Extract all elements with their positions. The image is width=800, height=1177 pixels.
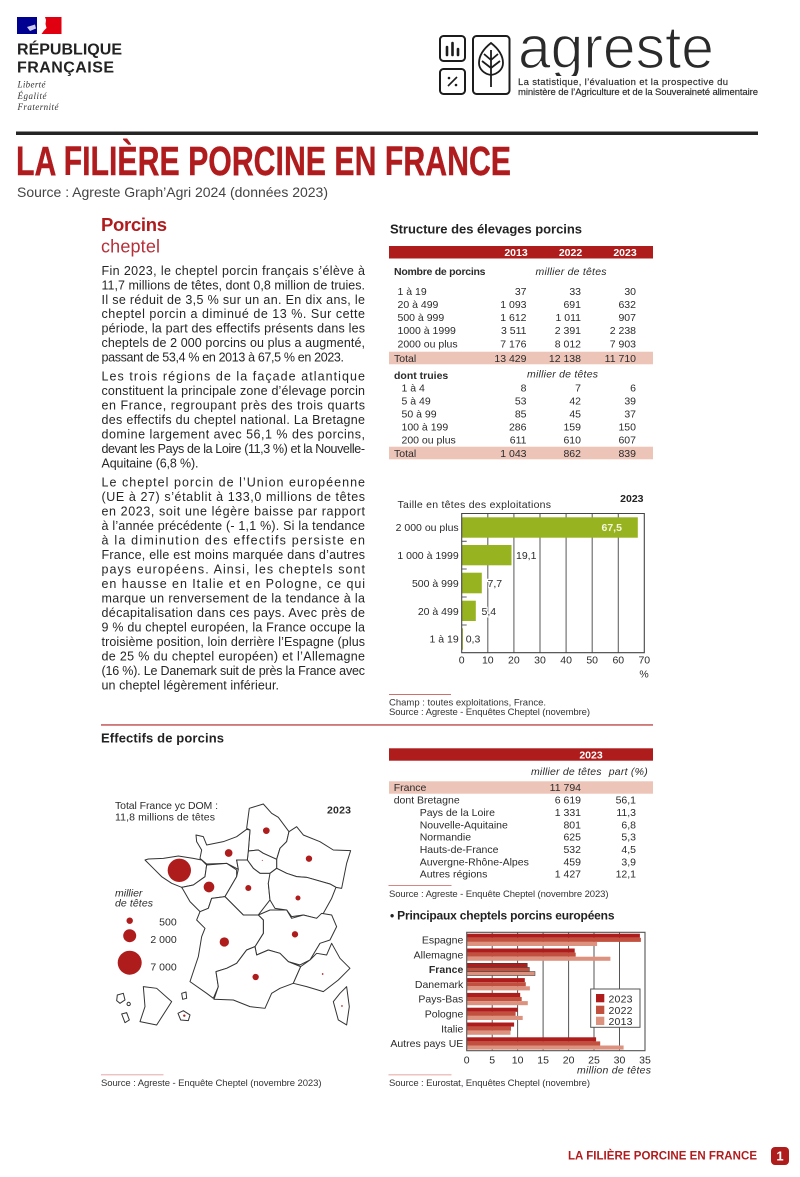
table: effectifs régionaux [389, 748, 653, 881]
heading: Effectifs de porcins: Effectifs de porcins [101, 730, 224, 746]
subheading: cheptel: cheptel [101, 236, 160, 256]
chart: taille en têtes des exploitations: 1 à 19 [429, 634, 459, 646]
table: effectifs régionaux: Auvergne-Rhône-Alpes [420, 856, 529, 868]
text block: paragraph 3: de 25 % du cheptel européen) et l’Allemagne [102, 650, 365, 664]
heading: Principaux cheptels porcins européens: • Principaux cheptels porcins européens [390, 908, 615, 922]
table: structure des élevages: 13 429 [494, 353, 527, 365]
table: effectifs régionaux: 459 [563, 856, 581, 868]
heading: Structure des élevages porcins: Structure des élevages porcins [390, 222, 582, 236]
map title: 2023 [327, 804, 351, 816]
chart: taille en têtes des exploitations: 20 [508, 654, 520, 666]
text block: paragraph 1: période, la part des effectifs présents dans les [102, 322, 365, 336]
text block: paragraph 1: cheptels de 2 000 porcins ou plus a augmenté, [102, 336, 365, 350]
axis labels: 20 [563, 1054, 575, 1066]
category labels: Pologne [425, 1008, 463, 1020]
text block: paragraph 2: des effectifs du cheptel national. La Bretagne [102, 413, 365, 427]
logo: agreste: La statistique, l’évaluation et la prospective du [518, 77, 728, 88]
subtitle: source: Source : Agreste Graph’Agri 2024 (données 2023) [17, 184, 328, 200]
text block: paragraph 2: en France, regroupant près des trois quarts [102, 398, 365, 412]
table: structure des élevages: 50 à 99 [402, 408, 437, 420]
table: effectifs régionaux: Normandie [420, 832, 471, 844]
category labels: Pays-Bas [418, 994, 463, 1006]
table: structure des élevages: 33 [569, 286, 581, 298]
table: structure des élevages: 1 à 19 [398, 286, 427, 298]
chart: taille en têtes des exploitations: 5,4 [482, 606, 496, 618]
map: France effectifs par région [115, 800, 351, 1025]
map title [115, 800, 351, 824]
axis labels: 5 [489, 1054, 495, 1066]
table: effectifs régionaux: 6 619 [555, 795, 581, 807]
logo: République française [16, 17, 122, 112]
table: structure des élevages: 159 [563, 422, 581, 434]
chart legend: 2013 [608, 1016, 633, 1028]
axis labels: 0 [464, 1054, 470, 1066]
table: effectifs régionaux: part (%) [608, 766, 648, 778]
chart: taille en têtes des exploitations: 10 [482, 654, 494, 666]
axis labels: 35 [639, 1054, 651, 1066]
table: structure des élevages: 2023 [613, 247, 637, 259]
table: structure des élevages: 500 à 999 [398, 312, 444, 324]
table: structure des élevages: 11 710 [605, 353, 636, 365]
table: structure des élevages: 907 [618, 312, 636, 324]
title: LA FILIÈRE PORCINE EN FRANCE [16, 138, 511, 184]
table: structure des élevages: 610 [563, 434, 581, 446]
icon: flag [17, 17, 62, 34]
icon: percent box [440, 69, 465, 94]
text block: paragraph 3: troisième position, loin derrière l’Espagne (plus [102, 635, 365, 649]
table: structure des élevages: 1 043 [500, 448, 527, 460]
text block: paragraph 2: domine largement avec 56,1 % des porcins, [102, 428, 365, 442]
table: effectifs régionaux: Autres régions [420, 869, 487, 881]
table: structure des élevages: 6 [630, 382, 636, 394]
table: structure des élevages [389, 246, 653, 460]
chart: taille en têtes des exploitations: 1 000 à 1999 [397, 550, 459, 562]
table: structure des élevages: 45 [569, 408, 581, 420]
category labels: Espagne [422, 934, 463, 946]
table: structure des élevages: 85 [515, 408, 527, 420]
text block: paragraph 1: cheptel porcin a diminué de 13 %. Sur cette [102, 307, 365, 321]
bars [462, 517, 638, 650]
note: champ et source [389, 694, 590, 718]
chart legend: 2023 [608, 994, 633, 1006]
text block: paragraph 2: Les trois régions de la façade atlantique [102, 370, 365, 384]
chart: taille en têtes des exploitations: 0,3 [466, 634, 480, 646]
source: carte: Source : Agreste - Enquête Cheptel (novembre 2023) [101, 1078, 322, 1089]
chart: principaux cheptels européens [390, 932, 652, 1076]
logo: République française: RÉPUBLIQUE [17, 40, 122, 58]
text block: paragraph 1: Il se réduit de 3,5 % sur un an. En dix ans, le [102, 293, 365, 307]
table: structure des élevages: 2 238 [610, 325, 636, 337]
table: effectifs régionaux: 3,9 [621, 856, 636, 868]
logo: République française: Fraternité [16, 102, 60, 112]
text block: paragraph 3: (16 %). Le Danemark suit de près la France avec [102, 664, 365, 678]
logo: République française: Liberté [16, 80, 46, 90]
category labels: Autres pays UE [390, 1038, 463, 1050]
axis labels: 30 [614, 1054, 625, 1066]
text block: paragraph 3: France, elle est moins marquée dans d’autres [102, 548, 365, 562]
table: structure des élevages: 37 [515, 286, 527, 298]
chart: taille en têtes des exploitations: 2 000 ou plus [396, 522, 459, 534]
category labels: France [429, 964, 463, 976]
table: structure des élevages: Total [394, 448, 416, 460]
text block: paragraph 2 [102, 370, 365, 470]
table: effectifs régionaux: 801 [563, 819, 581, 831]
category labels: Italie [441, 1023, 463, 1035]
text block: paragraph 3: pays européens. Ainsi, les cheptels sont [102, 562, 366, 576]
table: effectifs régionaux: 6,8 [621, 819, 636, 831]
table: structure des élevages: 7 176 [500, 338, 527, 350]
table: structure des élevages: 1 612 [500, 312, 527, 324]
table: effectifs régionaux: 1 427 [555, 869, 581, 881]
chart: taille en têtes des exploitations: Taille en têtes des exploitations [398, 499, 551, 511]
chart: taille en têtes des exploitations [396, 493, 650, 680]
text block: paragraph 3: en 2023, soit une légère baisse par rapport [102, 504, 366, 518]
heading: Porcins: Porcins [101, 214, 167, 235]
map title: 11,8 millions de têtes [115, 812, 215, 824]
series 2013 [467, 942, 624, 1050]
logo: agreste: agreste [518, 14, 714, 81]
table: structure des élevages: 100 à 199 [402, 422, 448, 434]
text block: paragraph 2: Aquitaine (6,8 %). [102, 456, 198, 470]
table: structure des élevages: 150 [618, 422, 636, 434]
icon: bar chart box [440, 36, 465, 61]
table: structure des élevages: 2000 ou plus [398, 338, 458, 350]
table: structure des élevages: 2 391 [555, 325, 581, 337]
chart legend: 2022 [608, 1005, 633, 1017]
table: structure des élevages: 7 [575, 382, 581, 394]
map legend: 7 000 [150, 962, 177, 974]
category labels: Allemagne [414, 949, 463, 961]
table: structure des élevages: Nombre de porcins [394, 266, 486, 278]
table: structure des élevages: 30 [624, 286, 636, 298]
axis labels: 25 [588, 1054, 600, 1066]
table: effectifs régionaux: 532 [563, 844, 581, 856]
table: structure des élevages: 8 012 [555, 338, 581, 350]
table: effectifs régionaux: 56,1 [616, 795, 636, 807]
chart: taille en têtes des exploitations: 2023 [620, 493, 644, 505]
map legend [115, 888, 177, 975]
table: structure des élevages: 862 [563, 448, 581, 460]
chart: taille en têtes des exploitations: 30 [534, 654, 546, 666]
icon: leaf box [473, 36, 510, 94]
axis labels: million de têtes [577, 1064, 652, 1076]
table: structure des élevages: 286 [509, 422, 527, 434]
footer: running title: LA FILIÈRE PORCINE EN FRANCE [568, 1150, 757, 1162]
table: structure des élevages: 5 à 49 [402, 396, 431, 408]
text block: paragraph 3 [102, 476, 366, 692]
map title: Total France yc DOM : [115, 800, 218, 812]
text block: paragraph 3: décapitalisation dans ces pays. Avec près de [102, 606, 365, 620]
table: structure des élevages: 632 [618, 299, 636, 311]
table: structure des élevages: 1 à 4 [402, 382, 425, 394]
table: effectifs régionaux: dont Bretagne [394, 795, 460, 807]
table: effectifs régionaux: 11 794 [550, 782, 581, 794]
table: structure des élevages: 3 511 [501, 325, 527, 337]
table: structure des élevages: 1 011 [556, 312, 581, 324]
table: effectifs régionaux: 5,3 [621, 832, 636, 844]
text block: paragraph 1 [102, 264, 365, 364]
chart: taille en têtes des exploitations: % [639, 668, 649, 680]
table: effectifs régionaux: 11,3 [616, 807, 636, 819]
chart: taille en têtes des exploitations: 40 [560, 654, 572, 666]
table: structure des élevages: 2013 [504, 247, 528, 259]
table: structure des élevages: 37 [624, 408, 636, 420]
table: structure des élevages: 691 [563, 299, 581, 311]
table: effectifs régionaux: Nouvelle-Aquitaine [420, 819, 508, 831]
table: structure des élevages: 39 [624, 396, 636, 408]
table: effectifs régionaux: 4,5 [621, 844, 636, 856]
text block: paragraph 3: 9 % du cheptel européen, la France occupe la [102, 620, 365, 634]
text block: paragraph 2: devant les Pays de la Loire (11,3 %) et la Nouvelle- [102, 442, 365, 456]
table: structure des élevages: dont truies [394, 370, 448, 382]
series 2023 [467, 934, 640, 1041]
text block: paragraph 3: (UE à 27) s’établit à 133,0 millions de têtes [102, 490, 365, 504]
table: effectifs régionaux: 625 [563, 832, 581, 844]
table: structure des élevages: 839 [618, 448, 636, 460]
category labels: Danemark [415, 979, 464, 991]
table: structure des élevages: millier de têtes [527, 368, 599, 380]
table: structure des élevages: 200 ou plus [402, 434, 456, 446]
table: structure des élevages: millier de têtes [536, 266, 607, 278]
text block: paragraph 3: à la diminution des effectifs persiste en [102, 534, 365, 548]
chart: taille en têtes des exploitations: 67,5 [602, 522, 622, 534]
series 2022 [467, 938, 641, 1046]
map circles [168, 827, 343, 1017]
text block: paragraph 1: Fin 2023, le cheptel porcin français s’élève à [102, 264, 365, 278]
table: structure des élevages: 8 [521, 382, 527, 394]
logo: agreste [440, 14, 760, 98]
note: champ et source: Source : Agreste - Enquêtes Cheptel (novembre) [389, 707, 590, 718]
map legend: millier [115, 888, 143, 900]
text block: paragraph 3: en hausse en Italie et en Pologne, ce qui [102, 577, 365, 591]
text block: paragraph 3: à l’année précédente (- 1,1 %). Si la tendance [102, 519, 365, 533]
chart legend [591, 989, 640, 1028]
map legend: 500 [159, 916, 177, 928]
text block: paragraph 1: passant de 53,4 % en 2013 à 67,5 % en 2023. [102, 350, 344, 364]
table: effectifs régionaux: 12,1 [616, 869, 636, 881]
map legend: de têtes [115, 898, 154, 910]
table: structure des élevages: 1 093 [500, 299, 527, 311]
category labels [390, 934, 464, 1050]
axis labels: 15 [537, 1054, 549, 1066]
table: structure des élevages: 53 [515, 396, 527, 408]
table: structure des élevages: 42 [569, 396, 581, 408]
table: effectifs régionaux: France [394, 782, 427, 794]
table: structure des élevages: 20 à 499 [398, 299, 439, 311]
text block: paragraph 2: constituent la principale zone d’élevage porcin [102, 384, 365, 398]
chart: taille en têtes des exploitations: 500 à 999 [412, 578, 459, 590]
chart: taille en têtes des exploitations: 70 [638, 654, 650, 666]
chart: taille en têtes des exploitations: 7,7 [488, 578, 502, 590]
source: graphique européen: Source : Eurostat, Enquêtes Cheptel (novembre) [389, 1078, 590, 1089]
table: structure des élevages: 7 903 [610, 338, 636, 350]
table: effectifs régionaux: 2023 [579, 750, 603, 762]
panel: texte porcins cheptel [101, 214, 366, 692]
table: structure des élevages: 2022 [559, 247, 582, 259]
text block: paragraph 3: marque un renversement de la tendance à la [102, 592, 365, 606]
logo: République française: FRANÇAISE [17, 60, 114, 76]
table: structure des élevages: 611 [510, 434, 527, 446]
chart: taille en têtes des exploitations: 50 [586, 654, 598, 666]
table: effectifs régionaux: 1 331 [555, 807, 581, 819]
table: effectifs régionaux: Hauts-de-France [420, 844, 499, 856]
chart: taille en têtes des exploitations: 20 à 499 [418, 606, 459, 618]
table: structure des élevages: 12 138 [549, 353, 581, 365]
text block: paragraph 3: un cheptel légèrement inférieur. [102, 678, 279, 692]
note: champ et source: Champ : toutes exploitations, France. [389, 698, 546, 708]
chart: taille en têtes des exploitations: 60 [612, 654, 624, 666]
logo: République française: Égalité [16, 91, 48, 101]
table: structure des élevages: 1000 à 1999 [398, 325, 456, 337]
table: structure des élevages: 607 [618, 434, 636, 446]
map legend: 2 000 [150, 934, 177, 946]
text block: paragraph 1: 11,7 millions de têtes, dont 0,8 million de truies. [102, 278, 365, 292]
axis labels [464, 1054, 652, 1076]
map regions [117, 804, 351, 1025]
logo: agreste: ministère de l’Agriculture et de la Souveraineté alimentaire [518, 87, 758, 98]
footer: page number: 1 [776, 1148, 784, 1164]
table: effectifs régionaux: millier de têtes [531, 766, 602, 778]
footer: page number [771, 1147, 789, 1165]
source: tableau régional: Source : Agreste - Enquête Cheptel (novembre 2023) [389, 889, 608, 900]
table: effectifs régionaux: Pays de la Loire [420, 807, 495, 819]
chart: taille en têtes des exploitations: 0 [459, 654, 465, 666]
text block: paragraph 3: Le cheptel porcin de l’Union européenne [102, 476, 365, 490]
axis labels: 10 [512, 1054, 524, 1066]
table: structure des élevages: Total [394, 353, 416, 365]
chart: taille en têtes des exploitations: 19,1 [516, 550, 537, 562]
